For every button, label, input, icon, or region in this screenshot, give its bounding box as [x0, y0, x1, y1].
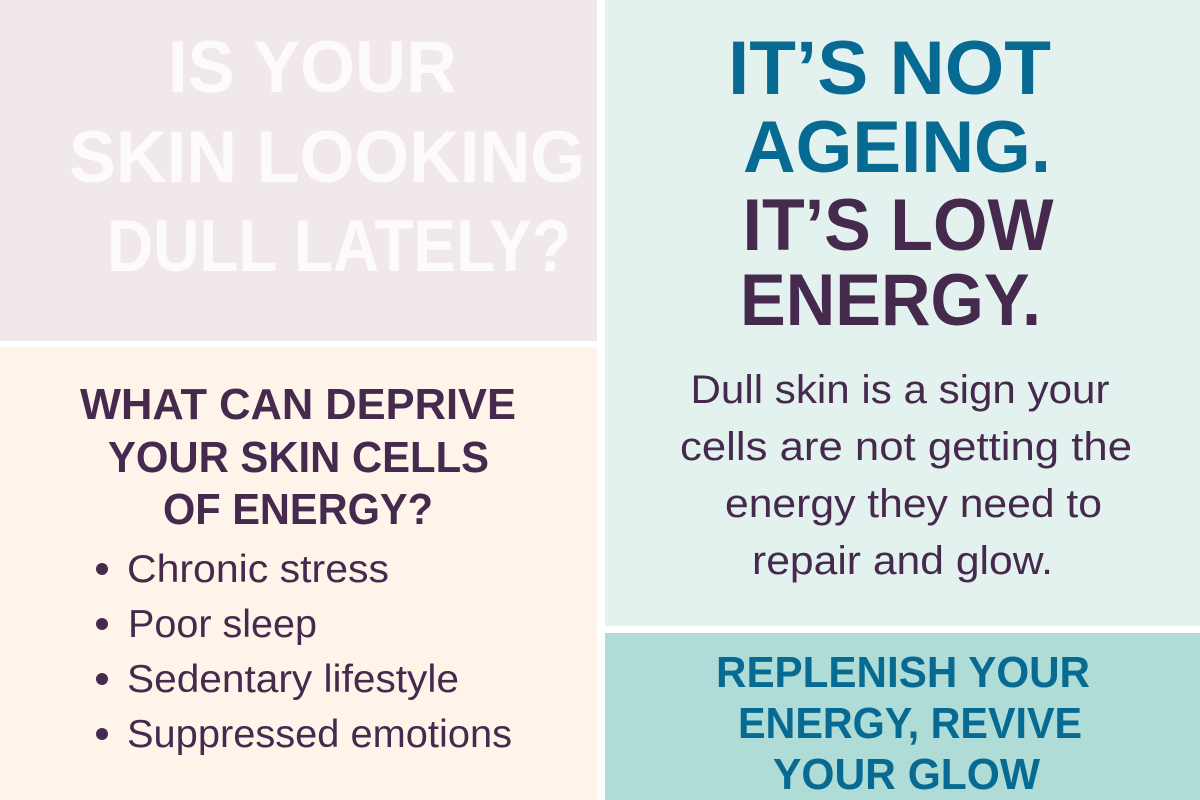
heading: it's not ageing, it's low energy: IT’S LOW — [742, 185, 1054, 266]
heading: replenish your energy, revive your glow: YOUR GLOW — [773, 750, 1040, 799]
panel: low energy explanation — [605, 0, 1200, 626]
list of causes — [96, 548, 512, 756]
list of causes: Chronic stress — [127, 548, 389, 591]
heading: is your skin looking dull lately: IS YOUR — [168, 27, 457, 108]
panel: call to action — [605, 633, 1200, 800]
heading: what can deprive your skin cells of energy: YOUR SKIN CELLS — [108, 433, 489, 482]
list of causes: Suppressed emotions — [127, 713, 512, 756]
heading: it's not ageing, it's low energy: IT’S NOT — [728, 26, 1051, 111]
body text: cells are not getting the — [680, 425, 1132, 469]
list of causes: Poor sleep — [128, 603, 317, 646]
panel: causes — [0, 347, 597, 800]
heading: it's not ageing, it's low energy: AGEING. — [743, 107, 1051, 188]
body text: energy they need to — [725, 482, 1102, 526]
list of causes: Sedentary lifestyle — [127, 658, 459, 701]
heading: replenish your energy, revive your glow — [716, 648, 1090, 799]
heading: what can deprive your skin cells of energy — [80, 380, 516, 534]
heading: is your skin looking dull lately: DULL LATELY? — [107, 206, 571, 287]
heading: what can deprive your skin cells of energy: OF ENERGY? — [163, 485, 433, 534]
heading: replenish your energy, revive your glow: REPLENISH YOUR — [716, 648, 1090, 697]
heading: replenish your energy, revive your glow: ENERGY, REVIVE — [738, 699, 1082, 748]
panel: dull skin question — [0, 0, 597, 341]
body text: repair and glow. — [752, 539, 1053, 583]
body text — [680, 368, 1132, 583]
heading: it's not ageing, it's low energy: ENERGY. — [740, 260, 1041, 341]
heading: what can deprive your skin cells of energy: WHAT CAN DEPRIVE — [80, 380, 516, 429]
heading: is your skin looking dull lately — [69, 27, 585, 287]
heading: is your skin looking dull lately: SKIN LOOKING — [69, 117, 585, 198]
body text: Dull skin is a sign your — [690, 368, 1110, 412]
heading: it's not ageing, it's low energy — [728, 26, 1054, 341]
